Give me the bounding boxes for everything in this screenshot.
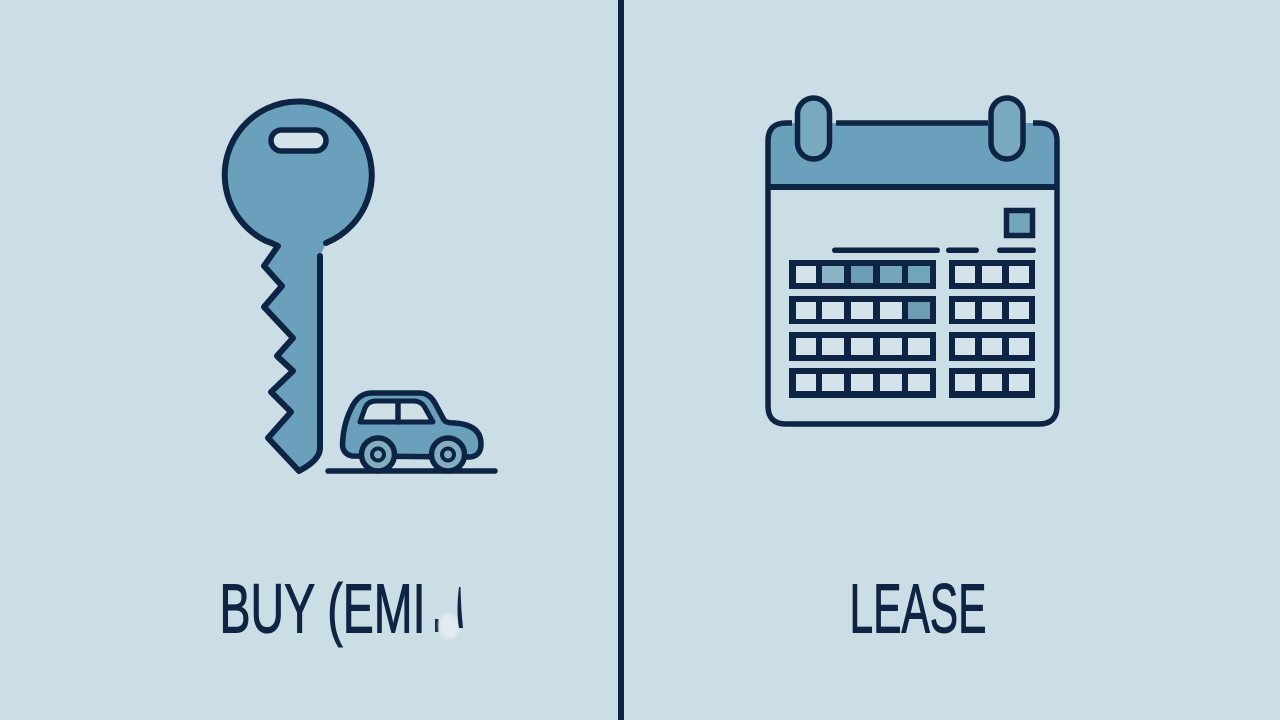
key slot (271, 130, 326, 151)
calendar header (768, 123, 1057, 187)
date cells (796, 266, 1029, 391)
car body (342, 393, 481, 457)
centre divider (618, 0, 624, 720)
label: buy: BUY (EMI (220, 570, 426, 648)
left binder ring (798, 98, 830, 159)
panel: lease (766, 98, 1059, 648)
panel: buy (220, 101, 495, 647)
small square marker (1006, 210, 1032, 236)
icon: calendar (766, 98, 1059, 424)
icon: car (328, 393, 495, 471)
header lines (832, 248, 1036, 253)
left wheel (362, 438, 394, 471)
date grid (789, 260, 1035, 398)
label: lease: LEASE (850, 570, 986, 648)
header divider (766, 184, 1059, 190)
icon: key (225, 101, 372, 471)
ground line (328, 468, 495, 474)
calendar outline (768, 123, 1057, 424)
right binder ring (991, 98, 1023, 159)
smudged closing characters (435, 587, 463, 639)
right wheel (432, 438, 464, 471)
car windows (360, 401, 433, 422)
